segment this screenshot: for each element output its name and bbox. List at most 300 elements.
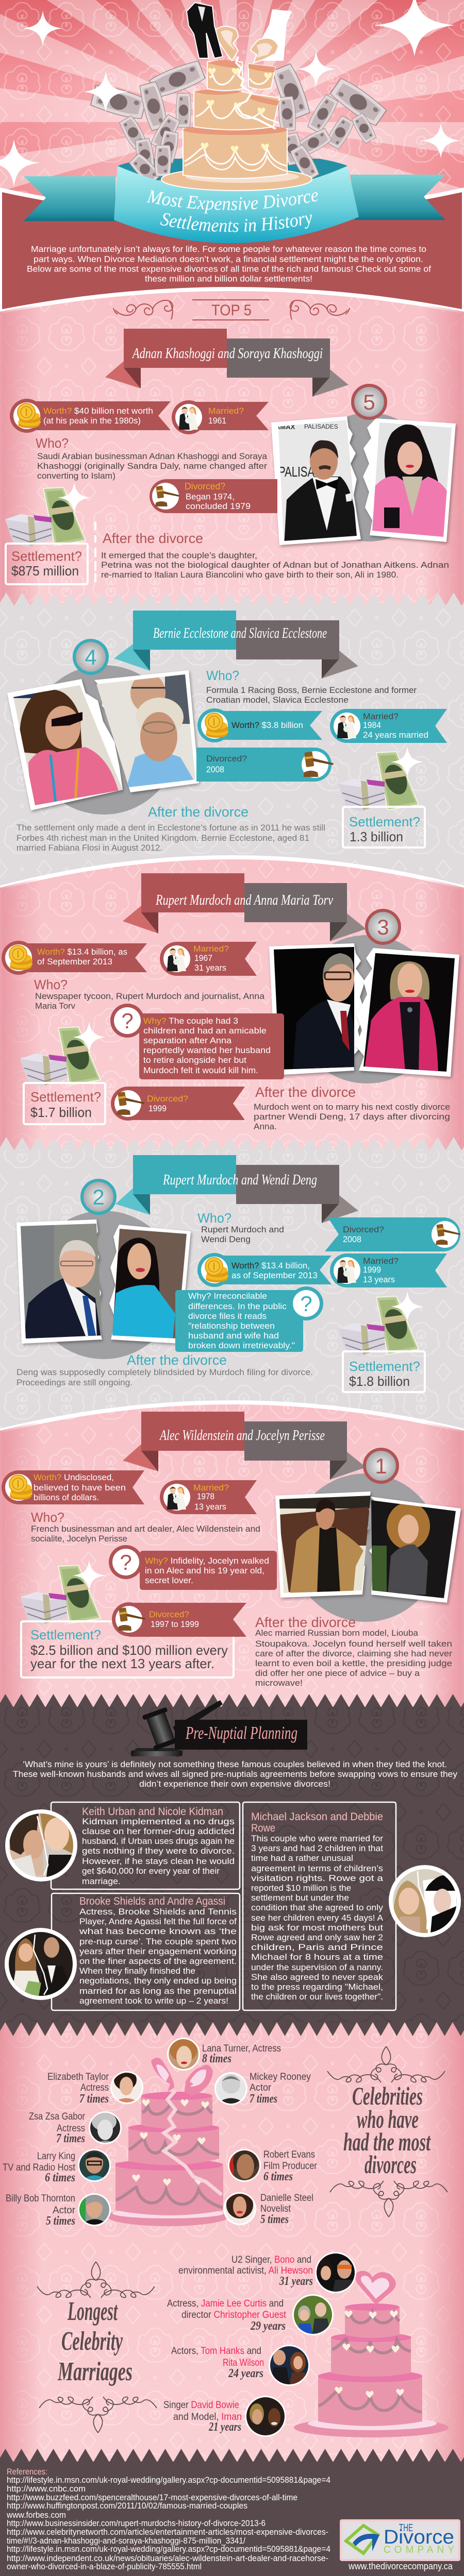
worth pill [2,941,147,975]
references list: References: [7,2467,47,2477]
photo: Keith and Nicole [5,1809,77,1882]
panel: Michael Jackson and Debbie Rowe: see her children every 45 days! A [251,1913,384,1923]
references list: www.forbes.com [6,2511,66,2520]
panel: number 3 background [0,857,464,1152]
references list: http://lifestyle.in.msn.com/uk-royal-wedding/gallery.aspx?cp-documentid=5095881&page=4 [7,2476,330,2485]
longest marriages list [163,2252,356,2437]
Danielle Steel [223,2192,313,2226]
panel: Brooke Shields and Andre Agassi: years after their engagement working [79,1946,237,1956]
Zsa Zsa Gabor: Zsa Zsa Gabor [29,2111,86,2122]
Jamie Lee Curtis and Christopher Guest: director Christopher Guest [181,2310,287,2320]
worth pill [197,708,322,742]
Mickey Rooney: 7 times [250,2092,277,2106]
title ribbon: Bernie and Slavica Ecclestone: Bernie Ecclestone and Slavica Ecclestone [153,625,327,641]
why box: children and had an amicable [143,1026,267,1036]
wedding cake illustration [161,3,312,191]
settlement box: Settlement? [11,548,82,564]
Tom Hanks and Rita Wilson: 24 years [228,2367,263,2380]
photo: Adnan and Soraya Khashoggi torn: PALISA [278,464,314,480]
worth pill: believed to have been [34,1483,126,1493]
settlement box [21,1621,234,1677]
why box [175,1286,323,1352]
Robert Evans [228,2149,318,2183]
why box [110,1004,284,1079]
heading: longest celebrity marriages: Celebrity [61,2327,123,2356]
references list: http://www.huffingtonpost.com/2011/10/02/famous-married-couples [7,2501,247,2511]
Billy Bob Thornton: 5 times [46,2214,75,2228]
who text: French businessman and art dealer, Alec Wildenstein and [31,1524,260,1534]
settlement box: $1.8 billion [349,1374,410,1389]
who text: Formula 1 Racing Boss, Bernie Ecclestone and former [206,685,417,695]
Jamie Lee Curtis and Christopher Guest: Actress, Jamie Lee Curtis and [167,2298,284,2309]
panel: Michael Jackson and Debbie Rowe: Rowe agreed and only saw her 2 [251,1933,383,1942]
heading: celebrities who have had the most divorces: who have [357,2105,419,2133]
why box: ? [300,1292,312,1316]
Bono and Ali Hewson [178,2252,356,2293]
icon: cash stacks [5,482,91,547]
who text: Maria Torv [35,1001,75,1011]
rank badge 3: 3 [377,915,389,939]
settlement box: year for the next 13 years after. [30,1656,214,1671]
divorce celebrities list [3,2037,318,2228]
pre-nup intro text: ‘What’s mine is yours’ is definitely not something these famous couples believed in when they tied the knot. [23,1759,447,1769]
heading: longest celebrity marriages: Marriages [57,2357,132,2386]
Jamie Lee Curtis and Christopher Guest [167,2294,334,2336]
after the divorce text [16,1352,313,1387]
Elizabeth Taylor [47,2070,143,2106]
panel: Keith Urban and Nicole Kidman: Keith Urban and Nicole Kidman [82,1806,223,1818]
married pill: 1961 [208,416,226,426]
panel: Brooke Shields and Andre Agassi: Player, Andre Agassi felt the full force of [79,1917,237,1926]
rank badge 2: 2 [92,1185,105,1209]
title ribbon front [114,166,359,243]
panel: Keith Urban and Nicole Kidman: get $640,000 for every year of their [82,1866,220,1876]
references list: http://www.cnbc.com [7,2484,86,2494]
Billy Bob Thornton [6,2193,111,2228]
logo: The Divorce Company [341,2520,459,2560]
worth pill: Worth? $40 billion net worth [43,406,153,416]
after the divorce text [254,1084,450,1131]
married pill [160,942,257,976]
Mickey Rooney: Mickey Rooney [250,2072,311,2082]
main title [146,190,318,232]
who text: Saudi Arabian businessman Adnan Khashoggi and Soraya [37,451,268,461]
divorced pill [150,479,277,513]
icon: cash stacks [338,1291,424,1356]
after the divorce text [16,804,325,853]
married pill: Married? [208,406,244,416]
who text: Who? [197,1210,231,1226]
main title: Most Expensive Divorce [146,190,318,213]
who text [31,1510,260,1544]
panel: Michael Jackson and Debbie Rowe: big ask for most mothers but [251,1923,383,1933]
married pill: 24 years married [363,730,428,740]
worth pill [197,1253,332,1287]
rank badge 2 [82,1180,115,1213]
references list: http://www.celebritynetworth.com/articles/entertainment-articles/most-expensive-divorces- [7,2528,328,2537]
icon: cash stacks [338,747,424,811]
panel: Brooke Shields and Andre Agassi: Brooke Shields and Andre Agassi [79,1895,225,1907]
why box: secret lover. [145,1575,193,1585]
worth pill: Worth? $3.8 billion [231,720,303,730]
panel: Brooke Shields and Andre Agassi: agreement took to write up – 2 years! [79,1996,228,2006]
after the divorce text: Stoupakova. Jocelyn found herself well taken [255,1639,452,1649]
Zsa Zsa Gabor: Actress [57,2123,85,2134]
panel: Michael Jackson and Debbie Rowe: under the supervision of a nanny. [251,1962,383,1972]
panel: Brooke Shields and Andre Agassi: what has become known as ‘the [79,1926,237,1936]
married pill: Married? [193,944,229,954]
panel: number 1 background [0,1402,464,1709]
why box [109,1545,277,1590]
title ribbon: Bernie and Slavica Ecclestone [114,611,358,679]
main title: Settlements in History [160,213,312,232]
panel: Michael Jackson and Debbie Rowe: visitation rights. Rowe got a [251,1873,384,1883]
Zsa Zsa Gabor: 7 times [56,2132,85,2145]
header background with rays [0,0,464,197]
references list: http://lifestyle.in.msn.com/uk-royal-wedding/gallery.aspx?cp-documentid=5095881&page=4 [7,2545,330,2554]
worth pill: as of September 2013 [231,1270,318,1280]
Mickey Rooney: Actor [250,2082,272,2093]
panel: Michael Jackson and Debbie Rowe: settlement but under the [251,1893,349,1903]
divorced pill: 2008 [343,1234,361,1244]
photo: Brooke and Andre [5,1928,77,2000]
top 5 heading: TOP 5 [211,302,252,319]
panel: Keith Urban and Nicole Kidman: husband, if Urban uses drugs again he [82,1836,235,1846]
divorced pill: Divorced? [147,1094,188,1104]
title ribbon: Rupert Murdoch and Anna Maria Torv: Rupert Murdoch and Anna Maria Torv [155,892,333,908]
who text [34,977,265,1011]
photo: Adnan and Soraya Khashoggi torn [271,413,456,546]
who text: Wendi Deng [201,1234,251,1244]
divorced pill: Began 1974, [186,492,235,502]
dashed divider [94,522,96,582]
panel: Michael Jackson and Debbie Rowe: 3 years and had 2 children in that [251,1843,383,1853]
panel: Brooke Shields and Andre Agassi: Actress, Brooke Shields and Tennis [79,1907,237,1917]
panel: Brooke Shields and Andre Agassi: pre-nup curse’. The couple spent two [79,1937,237,1946]
worth pill: Worth? Undisclosed, [34,1472,114,1482]
photo: Michael and Debbie [389,1865,461,1937]
logo: The Divorce Company: THE [399,2522,413,2534]
rank badge 4: 4 [85,645,97,669]
why box: Why? Irreconcilable [188,1291,267,1301]
Robert Evans: Film Producer [263,2161,318,2172]
logo: The Divorce Company: Divorce [384,2527,454,2548]
who text: Who? [34,977,68,992]
references list [6,2467,330,2571]
who text: Khashoggi (originally Sandra Daly, name changed after [37,461,267,471]
icon: cash stacks [20,1560,106,1625]
rank badge 3 [367,910,400,943]
intro text: Marriage unfortunately isn’t always for life. For some people for whatever reason the time comes to [31,244,426,254]
pre-nup intro text: These well-known husbands and wives all signed pre-nuptials agreements before swapping vows to ensure they [13,1769,458,1779]
Elizabeth Taylor: Elizabeth Taylor [47,2072,109,2082]
married pill: 1999 [363,1265,381,1275]
broken pink cake [107,2058,229,2226]
Lana Turner: Lana Turner, Actress [202,2043,281,2054]
rank badge 5 [353,385,386,418]
intro text [27,244,431,283]
title ribbon: Adnan Khashoggi and Soraya Khashoggi: Adnan Khashoggi and Soraya Khashoggi [131,345,323,362]
panel: Michael Jackson and Debbie Rowe: Michael for 8 hours at a time [251,1952,383,1962]
after the divorce text: The settlement only made a dent in Ecclestone’s fortune as in 2011 he was still [16,823,325,833]
after the divorce text: It emerged that the couple’s daughter, [101,550,257,561]
panel: Michael Jackson and Debbie Rowe: agreement in terms of children’s [251,1863,383,1873]
settlement box [343,807,425,848]
married pill: Married? [193,1483,229,1493]
panel: Keith Urban and Nicole Kidman: gets nothing if they were to divorce. [82,1846,235,1856]
panel: Michael Jackson and Debbie Rowe: Rowe [251,1822,275,1834]
references list: time/#!/3-adnan-khashoggi-and-soraya-khashoggi-875-million_3341/ [7,2536,245,2546]
panel: Keith Urban and Nicole Kidman: However, if he stays clean he would [82,1856,235,1866]
married pill: Married? [363,711,399,721]
photo: Adnan and Soraya Khashoggi torn: PALISADES [304,423,338,430]
panel: Keith Urban and Nicole Kidman: marriage. [82,1876,121,1886]
why box: Why? The couple had 3 [143,1016,238,1026]
married pill [160,1480,257,1514]
settlement box: $875 million [11,563,79,579]
Elizabeth Taylor: 7 times [79,2092,109,2106]
divorced pill: 1997 to 1999 [151,1619,199,1629]
who text: Who? [206,668,239,683]
after the divorce text: Proceedings are still ongoing. [16,1378,132,1387]
worth pill: billions of dollars. [34,1493,99,1502]
married pill [330,709,447,743]
after the divorce text: care of after the divorce, claiming she had never [255,1649,452,1658]
heading: longest celebrity marriages [37,2262,157,2433]
after the divorce text: Deng was supposedly completely blindsided by Murdoch filing for divorce. [16,1367,313,1377]
title ribbon tails [24,159,445,221]
after the divorce text [101,531,449,580]
why box: husband and wife had [188,1331,279,1341]
Larry King: 6 times [45,2171,75,2184]
intro text: Below are some of the most expensive divorces of all time of the rich and famous! Check out some of [27,264,431,274]
married pill: 13 years [194,1502,226,1512]
panel: Michael Jackson and Debbie Rowe: She also agreed to never speak [251,1972,384,1982]
panel: Brooke Shields and Andre Agassi: When they finally finished the [79,1966,195,1976]
divorced pill: Divorced? [185,481,225,492]
Elizabeth Taylor: Actress [80,2082,109,2093]
after the divorce text: Alec married Russian born model, Liouba [255,1628,419,1638]
intro text: these million and billion dollar settlements! [145,274,312,283]
divorced pill [111,1087,245,1121]
panel: Michael Jackson and Debbie Rowe: reported $10 million is the [251,1883,351,1893]
after the divorce text: Anna. [254,1122,277,1131]
photo: Adnan and Soraya Khashoggi torn: AMAX [275,423,295,431]
after the divorce text: re-married to Italian Laura Biancolini who gave birth to their son, Ali in 1980. [101,570,399,580]
panel: Michael Jackson and Debbie Rowe [243,1802,461,2010]
references list: owner-who-divorced-in-a-blaze-of-publicity-785555.html [7,2562,202,2571]
who text [206,668,417,705]
after the divorce text: partner Wendi Deng, 17 days after divorcing [254,1112,450,1122]
after the divorce text: After the divorce [255,1084,356,1100]
why box: ? [120,1550,132,1574]
Billy Bob Thornton: Billy Bob Thornton [6,2193,75,2204]
who text: Rupert Murdoch and [201,1225,284,1234]
why box: ? [121,1009,134,1033]
who text: Croatian model, Slavica Ecclestone [206,695,349,705]
why box: differences. In the public [188,1301,287,1311]
references list: http://www.businessinsider.com/rupert-murdochs-history-of-divorce-2013-6 [7,2519,266,2528]
panel: Brooke Shields and Andre Agassi: negotiations, they only ended up being [79,1976,237,1986]
dark red intro band [0,190,464,330]
David Bowie and Iman: Singer David Bowie [163,2400,239,2411]
married pill: 1984 [363,720,381,730]
photo: Bernie and Slavica Ecclestone torn [7,665,199,815]
Tom Hanks and Rita Wilson: Actors, Tom Hanks and [171,2346,261,2357]
settlement box: 1.3 billion [350,829,403,844]
Danielle Steel: Novelist [260,2204,291,2214]
Bono and Ali Hewson: environmental activist, Ali Hewson [178,2265,313,2276]
settlement box: Settlement? [349,1359,420,1374]
panel: Michael Jackson and Debbie Rowe: This couple who were married for [251,1834,383,1843]
divorced pill: concluded 1979 [186,501,251,511]
settlement box: $1.7 billion [30,1105,92,1120]
panel: Michael Jackson and Debbie Rowe: to the press regarding "Michael, [251,1982,383,1992]
Bono and Ali Hewson: 31 years [279,2275,313,2288]
panel: Michael Jackson and Debbie Rowe: condition that she agreed to only [251,1903,384,1912]
after the divorce text: Forbes 4th richest man in the United Kingdom. Bernie Ecclestone, aged 81 [16,833,309,843]
Danielle Steel: 5 times [260,2213,289,2226]
why box: Murdoch felt it would kill him. [143,1065,258,1075]
Danielle Steel: Danielle Steel [260,2193,313,2204]
David Bowie and Iman: 21 years [208,2420,241,2434]
settlement box [6,544,88,584]
divorced pill: Divorced? [206,754,247,764]
after the divorce text: microwave! [255,1678,303,1688]
settlement box: Settlement? [30,1627,101,1642]
panel: celebrity divorces background [0,2022,464,2463]
pre-nup intro text: didn’t experience their own expensive divorces! [139,1779,330,1789]
Bono and Ali Hewson: U2 Singer, Bono and [231,2255,311,2265]
heading: pre-nuptial planning [175,1720,307,1750]
settlement box: Settlement? [30,1089,101,1105]
Billy Bob Thornton: Actor [53,2205,76,2216]
after the divorce text: Murdoch went on to marry his next costly divorce [254,1102,450,1112]
photo: Rupert Murdoch and Wendi Deng torn [16,1211,191,1359]
flying money [84,59,388,186]
settlement box [24,1083,105,1124]
footer background [0,2449,464,2576]
after the divorce text: After the divorce [103,531,203,546]
married pill [330,1253,447,1287]
Jamie Lee Curtis and Christopher Guest: 29 years [250,2319,286,2333]
worth pill: Worth? $13.4 billion, as [37,947,127,957]
married pill: 13 years [363,1275,395,1284]
divorced pill [112,1602,246,1637]
panel: Keith Urban and Nicole Kidman: Kidman implemented a no drugs [82,1817,235,1826]
settlement box [343,1351,425,1392]
references list: http://www.buzzfeed.com/spenceralthouse/17-most-expensive-divorces-of-all-time [7,2493,297,2502]
divorced pill: Divorced? [343,1225,384,1234]
panel: Keith Urban and Nicole Kidman [5,1802,240,1889]
after the divorce text: After the divorce [255,1615,356,1630]
divorced pill: 2008 [206,765,224,774]
website url: www.thedivorcecompany.ca [348,2561,453,2571]
Lana Turner: 8 times [202,2052,231,2065]
Larry King [3,2149,111,2184]
top 5 heading [113,300,350,320]
worth pill [2,1470,144,1504]
who text: Who? [36,435,69,451]
divorced pill: Divorced? [149,1609,189,1619]
worth pill [10,399,171,433]
David Bowie and Iman: and Model, Iman [173,2412,242,2422]
who text [197,1210,284,1244]
panel: Brooke Shields and Andre Agassi: on the finer aspects of the agreement. [79,1956,237,1966]
Tom Hanks and Rita Wilson [171,2345,310,2386]
married pill [172,400,269,434]
Tom Hanks and Rita Wilson: Rita Wilson [223,2358,264,2368]
title ribbon: Adnan Khashoggi and Soraya Khashoggi [105,329,349,397]
worth pill: Worth? $13.4 billion, [231,1261,310,1270]
why box: separation after Anna [143,1036,232,1045]
references list: http://www.independent.co.uk/news/obituaries/alec-wildenstein-art-dealer-and-racehorse- [7,2554,328,2563]
who text: Newspaper tycoon, Rupert Murdoch and journalist, Anna [35,991,265,1001]
title ribbon: Rupert Murdoch and Wendi Deng [115,1155,358,1223]
Robert Evans: 6 times [263,2170,293,2183]
divorced pill [325,1217,460,1251]
after the divorce text [255,1615,452,1688]
rank badge 4 [74,640,107,673]
David Bowie and Iman [163,2396,286,2437]
after the divorce text: did offer her one piece of advice – buy a [255,1668,420,1678]
why box: in on Alec and his 19 year old, [145,1566,264,1575]
who text: converting to Islam) [37,471,115,481]
panel: Brooke Shields and Andre Agassi: married for as long as the prenuptial [79,1986,237,1996]
Larry King: Larry King [37,2151,75,2162]
icon: black gavel [131,1700,223,1756]
intro text: part ways. When Divorce Mediation doesn’t work, a financial settlement might be the only option. [34,255,423,264]
panel: Michael Jackson and Debbie Rowe: Michael Jackson and Debbie [251,1811,383,1823]
why box: to retire alongside her but [143,1055,246,1065]
why box: broken down irretrievably." [188,1341,295,1350]
why box: "relationship between [188,1321,275,1331]
title ribbon: Rupert Murdoch and Wendi Deng: Rupert Murdoch and Wendi Deng [162,1172,317,1188]
pre-nup intro text [13,1759,458,1789]
title ribbon: Rupert Murdoch and Anna Maria Torv [123,873,366,941]
sparkles [0,0,460,187]
after the divorce text: learnt to even boil a kettle, the presiding judge [255,1658,452,1668]
panel: Michael Jackson and Debbie Rowe: children, Paris and Prince [251,1942,383,1952]
panel: number 4 background [0,592,464,894]
rank badge 5: 5 [363,390,375,414]
photo: Rupert Murdoch and Anna Maria Torv torn [269,935,459,1083]
icon: cash stacks [20,1022,106,1087]
married pill: 1978 [197,1492,214,1501]
married pill: Married? [363,1256,399,1266]
after the divorce text: Petrina was not the biological daughter of Adnan but of Jonathan Aitkens. Adnan [101,560,449,570]
panel: Keith Urban and Nicole Kidman: clause on her former-drug addicted [82,1826,235,1836]
panel: number 2 background [0,1137,464,1438]
married pill: 1967 [194,953,212,963]
Mickey Rooney [214,2072,311,2106]
panel: Michael Jackson and Debbie Rowe: time had a rather unusual [251,1853,353,1863]
heading: pre-nuptial planning: Pre-Nuptial Planning [185,1723,297,1743]
who text: Who? [31,1510,64,1525]
heading: longest celebrity marriages: Longest [67,2297,118,2326]
divorced pill [196,748,334,782]
Robert Evans: Robert Evans [263,2149,315,2160]
who text: socialite, Jocelyn Perisse [31,1534,127,1544]
panel: Brooke Shields and Andre Agassi [5,1893,240,2010]
why box: reportedly wanted her husband [143,1045,271,1055]
after the divorce text: After the divorce [148,804,248,820]
title ribbon: Alec Wildenstein and Jocelyn Perisse: Alec Wildenstein and Jocelyn Perisse [159,1427,325,1444]
worth pill: of September 2013 [37,957,112,967]
heading: celebrities who have had the most divorces: Celebrities [352,2081,423,2110]
settlement box: Settlement? [349,814,420,829]
rank badge 1: 1 [375,1454,387,1478]
